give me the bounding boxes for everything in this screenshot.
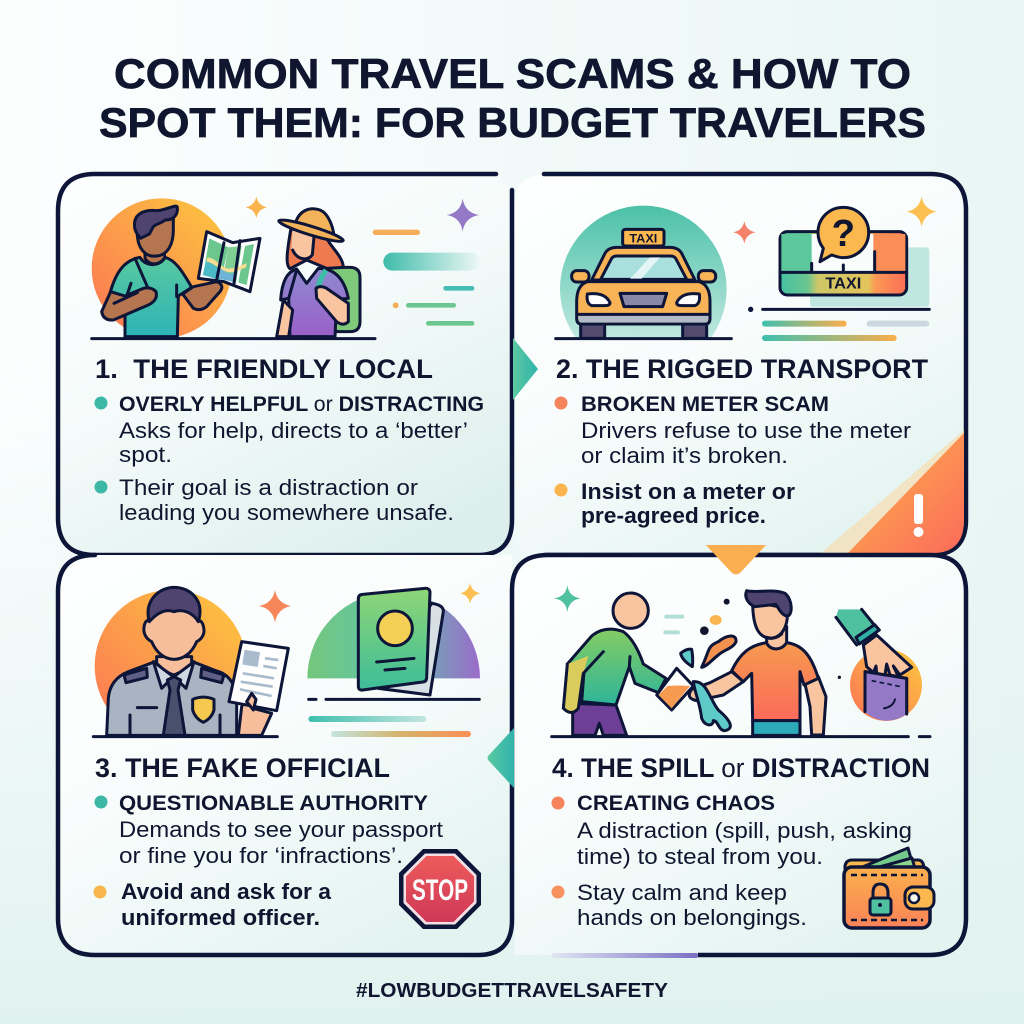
title: SPOT THEM: FOR BUDGET TRAVELERS — [99, 99, 926, 146]
tip text — [121, 879, 332, 930]
arrow: panel 1 to 2 — [513, 338, 538, 400]
hashtag: #LOWBUDGETTRAVELSAFETY — [356, 980, 669, 1002]
body text: Their goal is a distraction or — [119, 475, 418, 500]
illustration: local with map and traveler — [92, 197, 480, 339]
subheading: OVERLY HELPFUL or DISTRACTING — [119, 393, 484, 416]
body text — [577, 880, 807, 930]
body text: Demands to see your passport — [119, 817, 443, 842]
heading: 2. THE RIGGED TRANSPORT — [556, 354, 929, 384]
body text: or fine you for ‘infractions’. — [119, 843, 403, 868]
panel: the rigged transport — [514, 174, 966, 555]
tip text: Insist on a meter or — [581, 479, 795, 504]
body text — [119, 475, 454, 525]
tip text — [581, 479, 795, 528]
bullet dot — [94, 886, 106, 898]
body text: Asks for help, directs to a ‘better’ — [119, 418, 468, 443]
bullet dot — [94, 396, 108, 410]
heading: 4. THE SPILL or DISTRACTION — [552, 753, 930, 783]
illustration: spill distraction and pickpocket — [552, 585, 930, 737]
panel: the fake official — [58, 555, 512, 955]
illustration: taxi and meter: TAXI — [825, 276, 861, 293]
body text — [577, 818, 912, 869]
illustration: taxi and meter: TAXI — [629, 231, 657, 245]
icon: wallet — [844, 848, 934, 928]
subheading: BROKEN METER SCAM — [581, 393, 829, 416]
panel: the spill or distraction — [512, 555, 966, 958]
bullet dot — [554, 484, 568, 496]
body text: Drivers refuse to use the meter — [581, 418, 911, 443]
illustration: taxi and meter — [554, 196, 936, 341]
body text — [581, 418, 911, 468]
body text: spot. — [119, 442, 172, 467]
illustration: taxi and meter: ? — [832, 212, 855, 255]
body text: Stay calm and keep — [577, 880, 787, 905]
bullet dot — [94, 480, 108, 494]
body text: A distraction (spill, push, asking — [577, 818, 912, 843]
tip text: Avoid and ask for a — [121, 879, 332, 904]
icon: stop sign: STOP — [412, 874, 468, 907]
body text: or claim it’s broken. — [581, 443, 788, 468]
title — [99, 50, 926, 146]
arrow: panel 2 to 4 — [706, 545, 766, 574]
body text: time) to steal from you. — [577, 844, 823, 869]
panel: the friendly local — [58, 174, 512, 555]
icon: stop sign — [399, 849, 481, 929]
arrow: panel 3 to 4 — [488, 728, 514, 788]
tip text: pre-agreed price. — [581, 503, 766, 528]
body text — [119, 817, 443, 868]
heading: 1. THE FRIENDLY LOCAL — [95, 354, 433, 384]
title: COMMON TRAVEL SCAMS & HOW TO — [114, 50, 911, 97]
subheading: QUESTIONABLE AUTHORITY — [119, 792, 428, 815]
bullet dot — [552, 796, 564, 810]
tip text: uniformed officer. — [121, 905, 320, 930]
warning corner — [848, 433, 964, 553]
bullet dot — [552, 886, 564, 898]
body text: leading you somewhere unsafe. — [119, 500, 454, 525]
illustration: officer and passport — [93, 583, 481, 742]
heading: 3. THE FAKE OFFICIAL — [95, 753, 390, 783]
subheading: CREATING CHAOS — [577, 792, 775, 815]
body text — [119, 418, 468, 467]
bullet dot — [554, 396, 568, 410]
body text: hands on belongings. — [577, 905, 807, 930]
bullet dot — [94, 796, 108, 808]
